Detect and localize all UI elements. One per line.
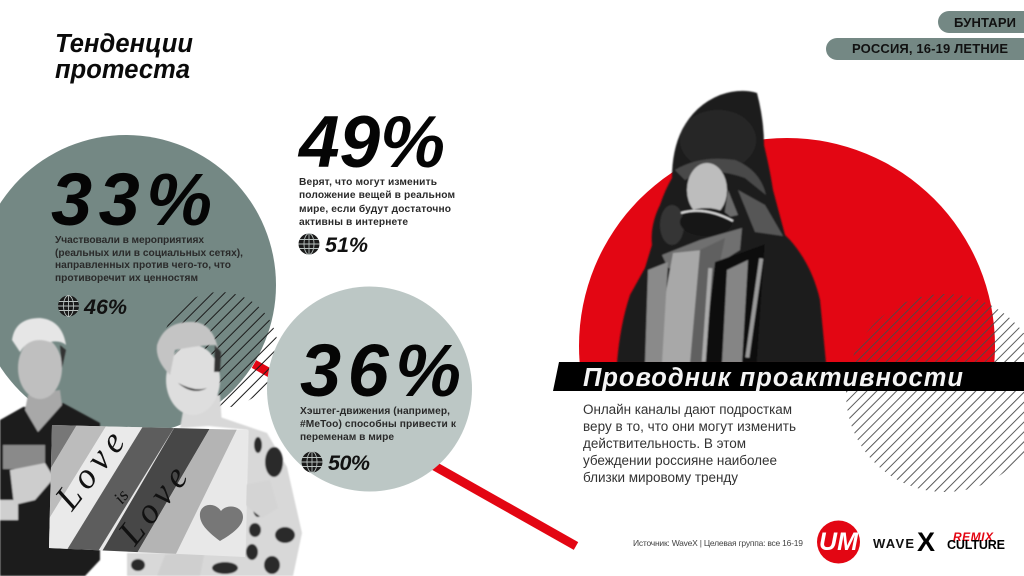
stat block 36%: переменам в мире: [300, 432, 394, 443]
logo: UM: UM: [819, 528, 859, 556]
title: протеста: [55, 56, 190, 84]
stat block 36%: [300, 329, 461, 475]
stat block 33%: Участвовали в мероприятиях: [55, 235, 204, 246]
tag: buntari: БУНТАРИ: [954, 15, 1016, 30]
text block: proactivity description: убеждении россияне наиболее: [583, 453, 777, 468]
photo: woman in fur hat: [617, 91, 826, 363]
tag: russia 16-19: [826, 38, 1024, 60]
stat block 49%: положение вещей в реальном: [299, 190, 455, 201]
stat block 49%: Верят, что могут изменить: [299, 177, 437, 188]
logo: Remix Culture: CULTURE: [947, 538, 1005, 552]
tag: russia 16-19: РОССИЯ, 16-19 ЛЕТНИЕ: [852, 41, 1008, 56]
source note: Источник: WaveX | Целевая группа: все 16-19: [633, 538, 803, 548]
stat block 33%: 33%: [51, 158, 212, 241]
stat block 33%: противоречит их ценностям: [55, 273, 198, 284]
handwriting on sign: is: [109, 486, 133, 507]
red circle behind portrait: [579, 138, 995, 362]
text block: proactivity description: близки мировому тренду: [583, 470, 738, 485]
hatched circle left: [162, 292, 278, 408]
stat block 49%: [297, 102, 455, 257]
stat block 33%: [51, 158, 243, 319]
logo: Remix Culture: REMIX: [953, 530, 994, 544]
red connecting line: [254, 364, 576, 546]
stat block 36%: 36%: [300, 329, 461, 412]
stat block 33%: 46%: [83, 295, 127, 319]
stat block 36%: 50%: [328, 451, 370, 475]
hatched circle right: [846, 294, 1024, 492]
text block: proactivity description: Онлайн каналы дают подросткам: [583, 402, 792, 417]
stat block 33%: (реальных или в социальных сетях),: [55, 248, 243, 259]
title: Тенденции: [55, 30, 193, 58]
stat block 49%: активны в интернете: [299, 217, 408, 228]
text block: proactivity description: [583, 402, 796, 485]
panel: light circle with 36% statistic: [267, 286, 472, 492]
handwriting on sign: Love: [109, 458, 195, 553]
panel: grey circle with 33% statistic: [0, 135, 276, 435]
logo: WaveX: X: [917, 527, 935, 557]
handwriting on sign: Love: [46, 423, 132, 518]
stat block 49%: 51%: [325, 233, 368, 257]
left boy: [0, 403, 100, 576]
stat block 49%: 49%: [297, 102, 445, 183]
heading: provodnik: Проводник проактивности: [583, 364, 963, 392]
right boy: [127, 417, 302, 576]
handwriting on sign: [46, 423, 195, 553]
logo: WaveX: [873, 527, 935, 557]
logo: UM: [817, 520, 860, 564]
photo: two young men with sign: [0, 318, 302, 576]
stat block 33%: направленных против чего-то, что: [55, 260, 231, 271]
title: [55, 30, 193, 84]
logo: WaveX: WAVE: [873, 536, 914, 551]
text block: proactivity description: действительность. В этом: [583, 436, 746, 451]
text block: proactivity description: веру в то, что они могут изменить: [583, 419, 796, 434]
heart: [200, 505, 243, 541]
stat block 36%: Хэштег-движения (например,: [300, 406, 450, 417]
tag: buntari: [938, 11, 1024, 33]
protest sign: [49, 425, 248, 557]
stat block 36%: #MeToo) способны привести к: [300, 418, 457, 430]
title bar: [553, 362, 1024, 392]
stat block 49%: мире, если будут достаточно: [299, 203, 451, 215]
logo: Remix Culture: [947, 530, 1005, 552]
